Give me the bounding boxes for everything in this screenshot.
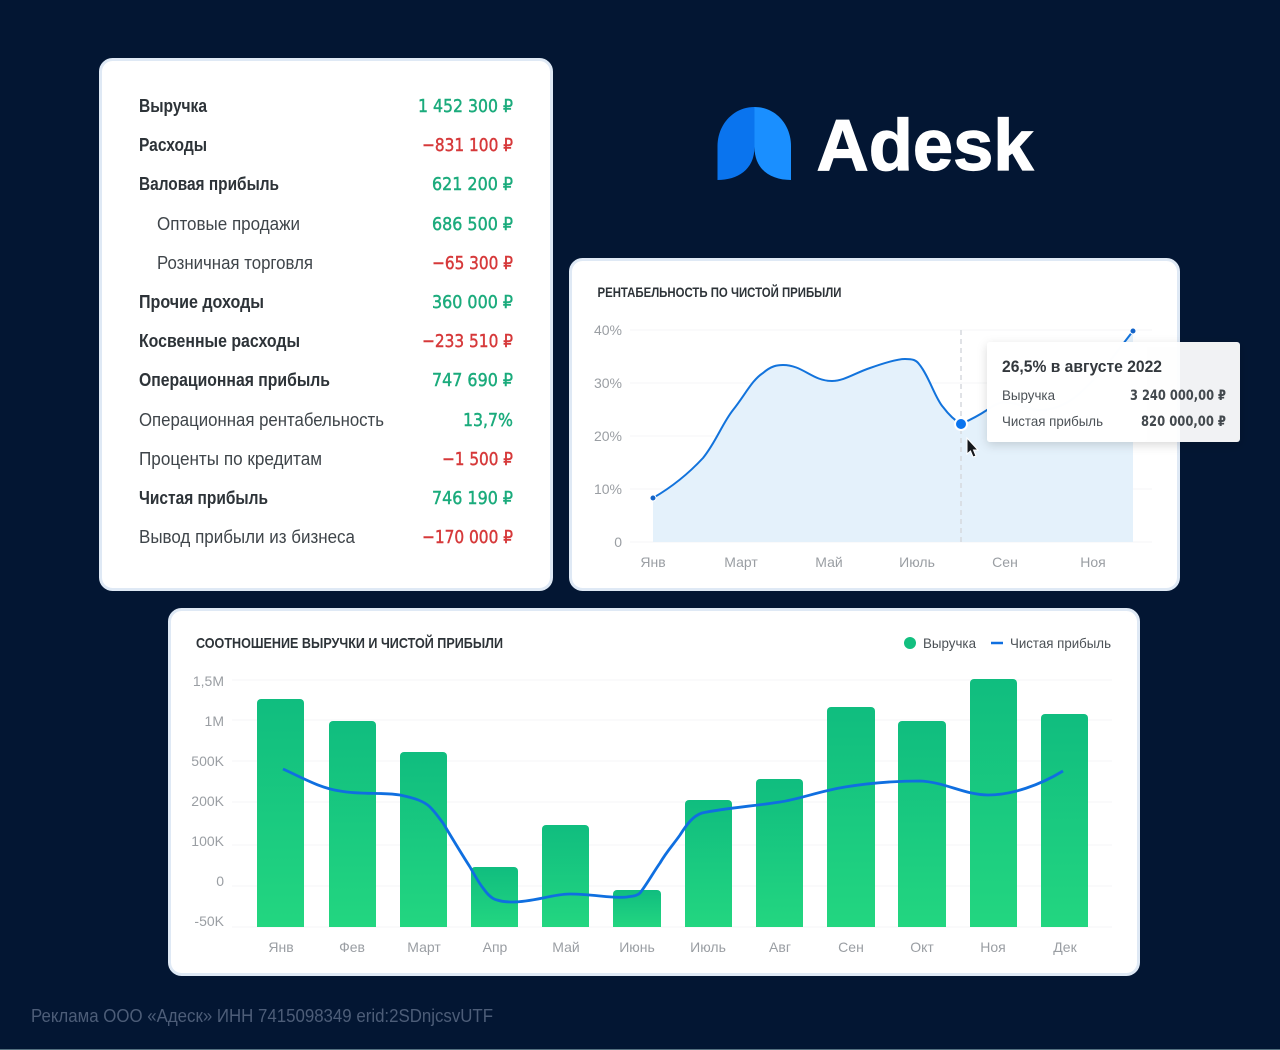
y axis: 500K bbox=[191, 753, 225, 769]
row: Расходы: Расходы bbox=[139, 135, 207, 155]
row: Вывод прибыли из бизнеса: Вывод прибыли из бизнеса bbox=[139, 527, 356, 547]
x axis labels bbox=[640, 554, 1106, 570]
row: Операционная рентабельность: 13,7% bbox=[463, 410, 513, 431]
row: Расходы: −831 100 ₽ bbox=[422, 135, 513, 156]
y axis: 0 bbox=[216, 873, 224, 889]
row: Проценты по кредитам: Проценты по кредитам bbox=[139, 449, 322, 469]
tooltip bbox=[987, 342, 1240, 442]
row: Розничная торговля: Розничная торговля bbox=[157, 253, 313, 273]
row: Чистая прибыль: Чистая прибыль bbox=[139, 488, 268, 508]
tooltip row: net profit: 820 000,00 ₽ bbox=[1141, 414, 1226, 430]
footer disclaimer: Реклама ООО «Адеск» ИНН 7415098349 erid:2SDnjcsvUTF bbox=[31, 1006, 493, 1026]
row: Косвенные расходы: Косвенные расходы bbox=[139, 331, 300, 351]
row: Выручка: Выручка bbox=[139, 96, 208, 116]
x axis labels: Фев bbox=[339, 939, 365, 955]
x axis labels: Июль bbox=[690, 939, 726, 955]
x axis labels: Март bbox=[724, 554, 758, 570]
row: Операционная прибыль: 747 690 ₽ bbox=[432, 370, 513, 391]
y axis: 100K bbox=[191, 833, 225, 849]
crosshair bbox=[960, 330, 962, 542]
y axis: 0 bbox=[614, 534, 622, 550]
x axis labels: Янв bbox=[640, 554, 666, 570]
x axis labels bbox=[268, 939, 1078, 955]
logo wordmark: Adesk bbox=[816, 106, 1034, 186]
row: Прочие доходы: Прочие доходы bbox=[139, 292, 264, 312]
y axis: 10% bbox=[594, 481, 622, 497]
row: Выручка bbox=[139, 96, 513, 117]
row: Валовая прибыль bbox=[139, 174, 513, 195]
end point bbox=[1130, 328, 1136, 334]
y axis: 1,5M bbox=[193, 673, 224, 689]
profit line bbox=[653, 331, 1133, 498]
row: Чистая прибыль bbox=[139, 488, 513, 509]
x axis labels: Дек bbox=[1053, 939, 1078, 955]
area under line bbox=[653, 331, 1133, 542]
x axis labels: Апр bbox=[483, 939, 508, 955]
y axis: 200K bbox=[191, 793, 225, 809]
x axis labels: Авг bbox=[769, 939, 791, 955]
row: Розничная торговля: −65 300 ₽ bbox=[432, 253, 513, 274]
x axis labels: Март bbox=[407, 939, 441, 955]
row: Операционная рентабельность bbox=[139, 410, 513, 431]
legend bbox=[904, 635, 1111, 651]
tooltip row: net profit: Чистая прибыль bbox=[1002, 413, 1103, 429]
tooltip row: revenue bbox=[1002, 387, 1226, 404]
row: Розничная торговля bbox=[157, 253, 513, 274]
tooltip cover hiding the line bbox=[987, 342, 1147, 442]
row: Проценты по кредитам bbox=[139, 449, 513, 470]
bars bbox=[257, 679, 1088, 927]
row: Выручка: 1 452 300 ₽ bbox=[418, 96, 513, 117]
panel: financial report table bbox=[100, 60, 552, 590]
chart title: СООТНОШЕНИЕ ВЫРУЧКИ И ЧИСТОЙ ПРИБЫЛИ bbox=[196, 634, 503, 652]
y axis: 30% bbox=[594, 375, 622, 391]
row: Косвенные расходы bbox=[139, 331, 513, 352]
row: Прочие доходы: 360 000 ₽ bbox=[432, 292, 513, 313]
tooltip row: net profit bbox=[1002, 413, 1226, 430]
y axis: 40% bbox=[594, 322, 622, 338]
row: Расходы bbox=[139, 135, 513, 156]
start point bbox=[650, 495, 656, 501]
x axis labels: Янв bbox=[268, 939, 294, 955]
x axis labels: Май bbox=[815, 554, 843, 570]
x axis labels: Ноя bbox=[1080, 554, 1106, 570]
icon: cursor bbox=[967, 438, 978, 457]
legend: Выручка bbox=[923, 635, 976, 651]
y axis bbox=[191, 673, 1112, 929]
net profit line bbox=[283, 769, 1063, 902]
logo: Adesk bbox=[718, 106, 1034, 186]
row: Операционная прибыль bbox=[139, 370, 513, 391]
x axis labels: Июнь bbox=[619, 939, 655, 955]
row: Косвенные расходы: −233 510 ₽ bbox=[422, 331, 513, 352]
x axis labels: Май bbox=[552, 939, 580, 955]
row: Вывод прибыли из бизнеса bbox=[139, 527, 513, 548]
row: Оптовые продажи: Оптовые продажи bbox=[157, 214, 300, 234]
y axis: -50K bbox=[194, 913, 225, 929]
y axis: 1M bbox=[205, 713, 224, 729]
row: Прочие доходы bbox=[139, 292, 513, 313]
row: Оптовые продажи: 686 500 ₽ bbox=[432, 214, 513, 235]
y axis: 20% bbox=[594, 428, 622, 444]
row: Чистая прибыль: 746 190 ₽ bbox=[432, 488, 513, 509]
x axis labels: Июль bbox=[899, 554, 935, 570]
chart title: РЕНТАБЕЛЬНОСТЬ ПО ЧИСТОЙ ПРИБЫЛИ bbox=[598, 283, 842, 300]
row: Валовая прибыль: 621 200 ₽ bbox=[432, 174, 513, 195]
panel: net profit margin chart bbox=[570, 260, 1178, 590]
row: Операционная рентабельность: Операционная рентабельность bbox=[139, 410, 384, 430]
tooltip row: revenue: 3 240 000,00 ₽ bbox=[1130, 388, 1226, 404]
x axis labels: Окт bbox=[910, 939, 934, 955]
x axis labels: Сен bbox=[992, 554, 1018, 570]
active point bbox=[955, 418, 967, 430]
row: Оптовые продажи bbox=[157, 214, 513, 235]
row: Вывод прибыли из бизнеса: −170 000 ₽ bbox=[422, 527, 513, 548]
icon: Adesk mark bbox=[718, 107, 791, 180]
tooltip title: 26,5% в августе 2022 bbox=[1002, 357, 1162, 376]
tooltip row: revenue: Выручка bbox=[1002, 387, 1055, 403]
x axis labels: Ноя bbox=[980, 939, 1006, 955]
row: Операционная прибыль: Операционная прибыль bbox=[139, 370, 330, 390]
y axis bbox=[594, 322, 1152, 550]
row: Проценты по кредитам: −1 500 ₽ bbox=[442, 449, 513, 470]
row: Валовая прибыль: Валовая прибыль bbox=[139, 174, 279, 194]
x axis labels: Сен bbox=[838, 939, 864, 955]
legend: Чистая прибыль bbox=[1010, 635, 1111, 651]
panel: revenue vs net profit chart bbox=[170, 610, 1138, 974]
